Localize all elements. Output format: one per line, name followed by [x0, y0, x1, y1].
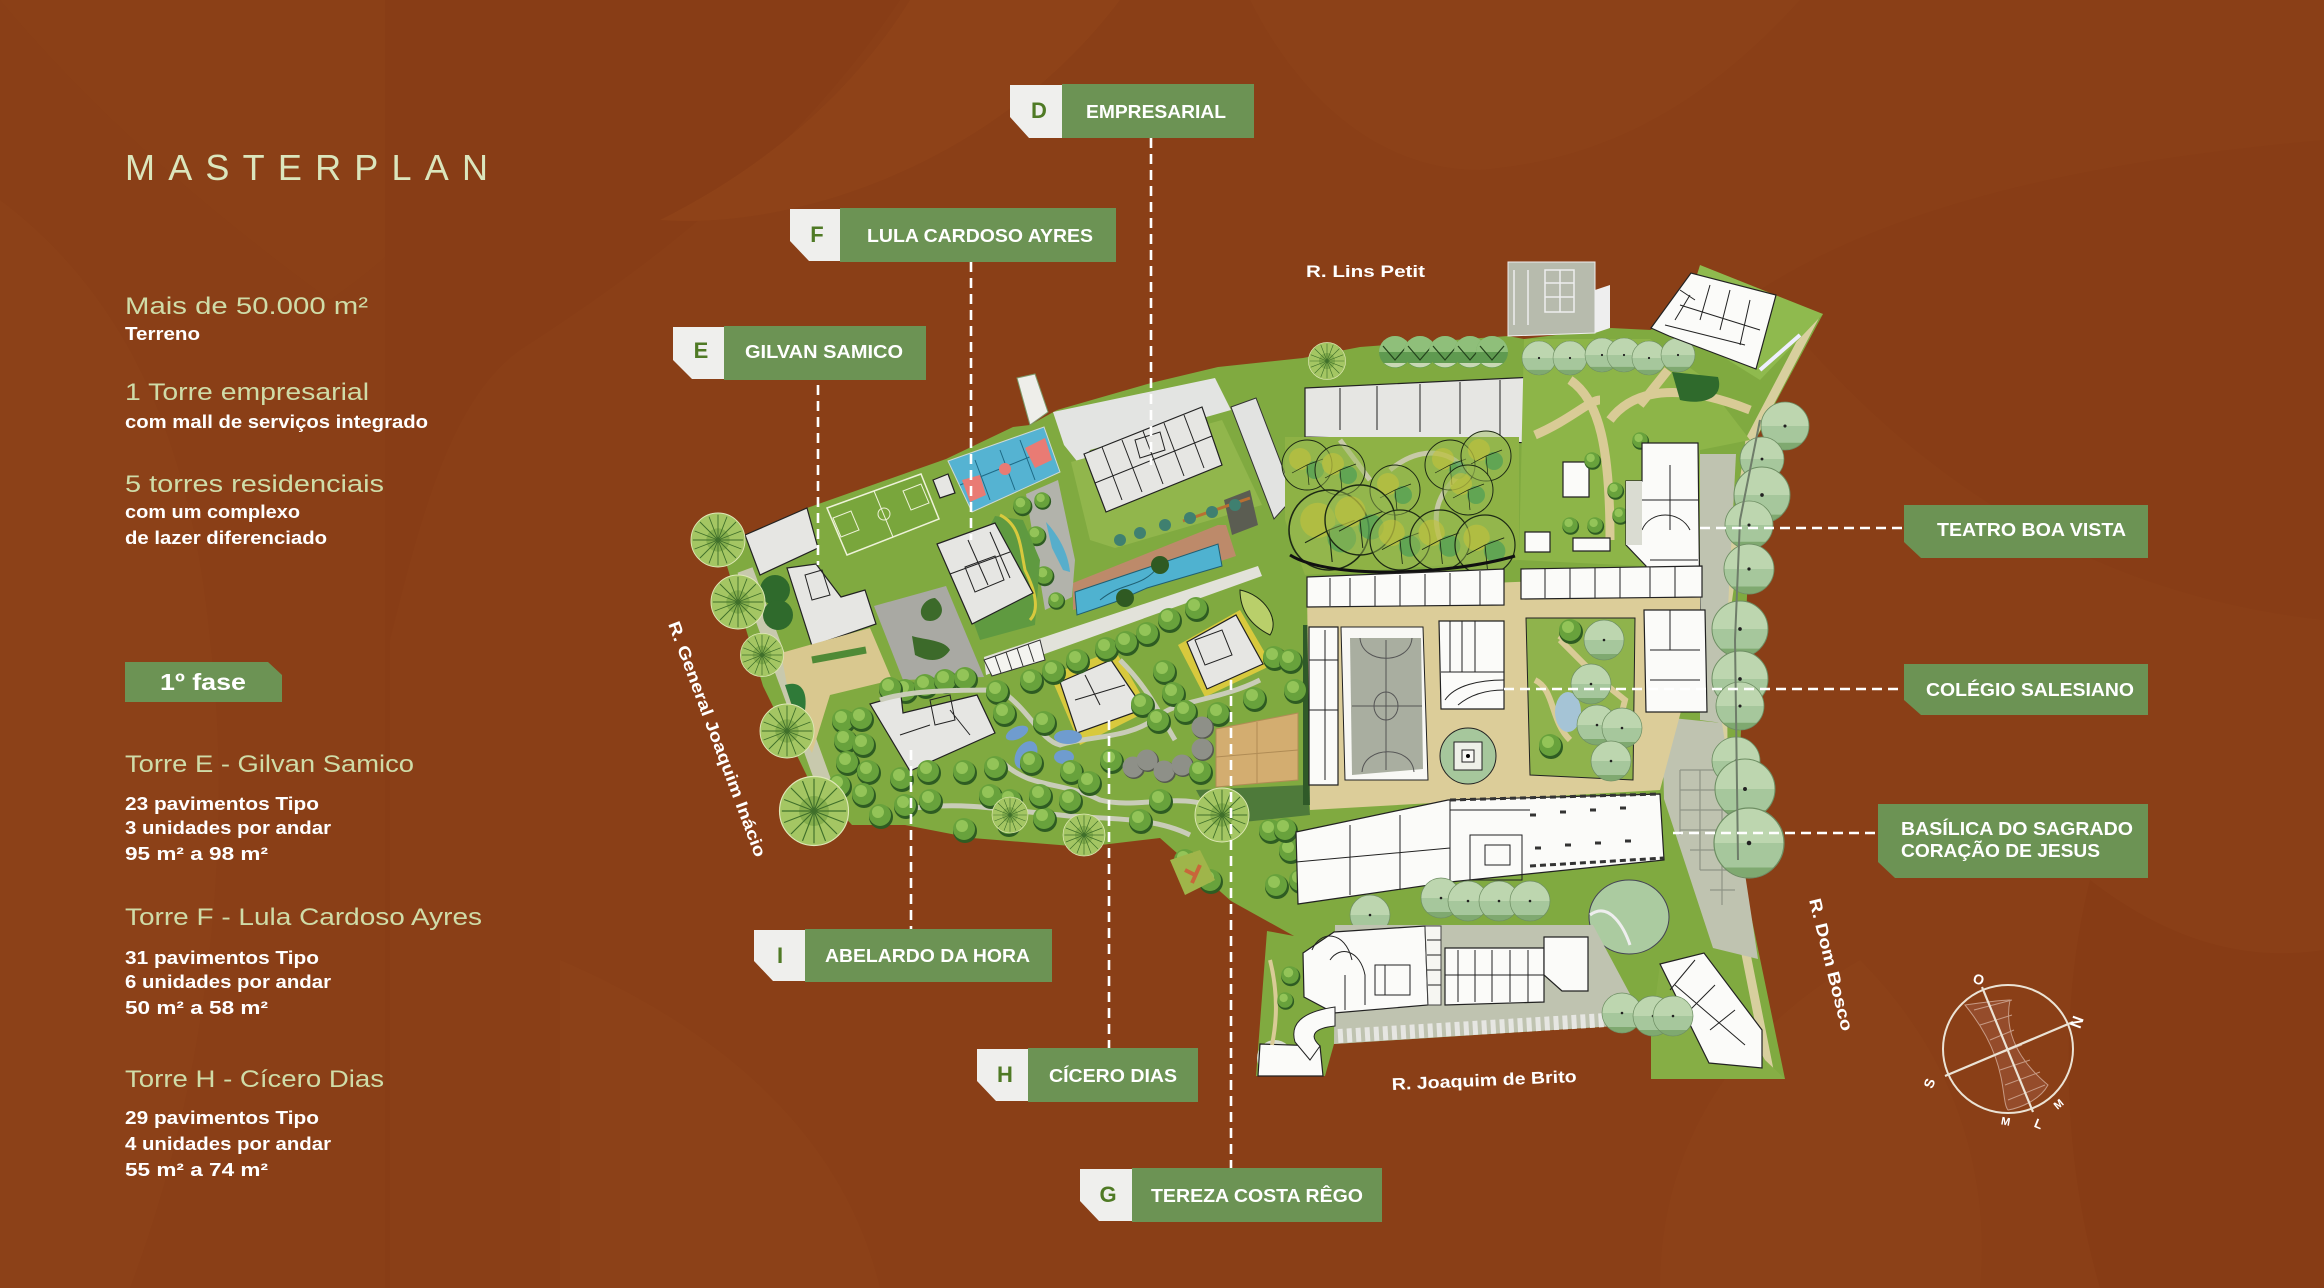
park trees — [828, 597, 1313, 899]
tower label E: E — [694, 338, 708, 363]
dome tree — [1589, 880, 1669, 954]
courtyard garden — [1526, 618, 1642, 781]
tower label E — [673, 326, 926, 380]
leader lines — [818, 138, 1904, 1168]
compass: O — [1971, 970, 1987, 989]
street name: General Joaquim Inácio: R. General Joaquim Inácio — [664, 619, 770, 860]
tower F specs: Torre F - Lula Cardoso Ayres — [125, 904, 482, 931]
north east tower — [1651, 265, 1823, 380]
compass: L — [2032, 1115, 2045, 1132]
north east garden — [1519, 338, 1750, 566]
badge: first phase — [125, 662, 282, 702]
key figure: land area: Terreno — [125, 324, 200, 344]
amphitheater — [1439, 621, 1504, 709]
parking stalls — [1680, 770, 1735, 905]
basketball court blue — [948, 427, 1060, 512]
grey road east — [1662, 454, 1758, 959]
tower label H — [977, 1048, 1198, 1102]
ground — [727, 273, 1823, 1079]
street name: Joaquim de Brito: R. Joaquim de Brito — [1391, 1067, 1577, 1094]
south east trees — [1602, 993, 1693, 1036]
compass: M — [2052, 1097, 2066, 1112]
landmark label: Colégio Salesiano — [1904, 664, 2148, 715]
compass — [1920, 970, 2088, 1132]
east boulevard trees — [1712, 402, 1809, 878]
tower label F: LULA CARDOSO AYRES — [867, 226, 1093, 246]
square fountain with tree — [1440, 728, 1496, 784]
tower H specs: 29 pavimentos Tipo — [125, 1108, 319, 1128]
park paths — [880, 660, 1260, 835]
tower E — [760, 564, 876, 646]
tower label G: G — [1099, 1182, 1117, 1207]
tower H specs: 4 unidades por andar — [125, 1134, 331, 1154]
tower label D: D — [1031, 98, 1047, 123]
south building and garage — [1303, 925, 1646, 1044]
landmark label: Colégio Salesiano: COLÉGIO SALESIANO — [1926, 679, 2134, 700]
sand plaza — [781, 628, 892, 753]
landmark label: Basílica — [1878, 804, 2148, 878]
key figure: residential towers: com um complexo — [125, 502, 300, 522]
tower label G: TEREZA COSTA RÊGO — [1151, 1185, 1363, 1206]
tower E specs: 23 pavimentos Tipo — [125, 794, 319, 814]
south east tower — [1651, 953, 1785, 1079]
tower H specs: 55 m² a 74 m² — [125, 1160, 268, 1180]
compass: S — [1920, 1076, 1938, 1090]
grey service yard with small pool — [1013, 480, 1075, 610]
tower label D — [1010, 84, 1254, 138]
street name: Dom Bosco: R. Dom Bosco — [1805, 896, 1856, 1033]
tree row behind tower I — [879, 667, 978, 704]
south trees — [1350, 878, 1550, 935]
palms along west edge — [691, 342, 1346, 846]
tower label G — [1080, 1168, 1382, 1222]
side road along west edge — [745, 570, 830, 800]
parking block — [1508, 262, 1610, 336]
sports court — [1341, 627, 1428, 780]
compass: N — [2068, 1014, 2088, 1031]
tower label I — [754, 929, 1052, 982]
tower label I: I — [777, 943, 783, 968]
tower H specs — [125, 1066, 384, 1180]
landmark label: Basílica: CORAÇÃO DE JESUS — [1901, 840, 2100, 861]
ponds — [1004, 722, 1082, 773]
tower G — [1178, 590, 1273, 697]
tower E specs — [125, 751, 414, 864]
tower I — [870, 695, 995, 771]
tree row north — [1379, 336, 1508, 368]
dark garden band and hedge — [1196, 625, 1313, 825]
east street verge — [1722, 316, 1815, 1075]
landmark label: Basílica: BASÍLICA DO SAGRADO — [1901, 818, 2133, 839]
site map illustration — [691, 262, 1823, 1079]
left column text — [125, 147, 488, 1180]
key figure: land area: Mais de 50.000 m² — [125, 293, 368, 320]
key figure: business tower — [125, 379, 428, 432]
tower F — [937, 515, 1040, 640]
landmark label: Teatro Boa Vista: TEATRO BOA VISTA — [1937, 520, 2126, 540]
north block — [1305, 377, 1537, 449]
leisure deck and pool — [1073, 525, 1236, 615]
tower E specs: 3 unidades por andar — [125, 818, 331, 838]
title: MASTERPLAN — [125, 147, 488, 188]
compass: M — [2000, 1115, 2011, 1129]
key figure: residential towers: 5 torres residenciais — [125, 471, 384, 498]
tower label H: CÍCERO DIAS — [1049, 1065, 1177, 1086]
tower E specs: 95 m² a 98 m² — [125, 844, 268, 864]
playground — [1170, 850, 1215, 895]
south west corner structure — [1257, 960, 1335, 1076]
landmark label: Teatro Boa Vista — [1904, 505, 2148, 558]
tower F specs — [125, 904, 482, 1018]
tower F specs: 6 unidades por andar — [125, 972, 331, 992]
tower label H: H — [997, 1062, 1013, 1087]
key figure: business tower: 1 Torre empresarial — [125, 379, 369, 406]
tower label F — [790, 208, 1116, 262]
school wings and sand paths — [1307, 566, 1707, 810]
key figure: business tower: com mall de serviços integrado — [125, 412, 428, 432]
tower label D: EMPRESARIAL — [1086, 102, 1226, 122]
entry strip — [1017, 374, 1048, 425]
tower label E: GILVAN SAMICO — [745, 342, 903, 362]
tower H specs: Torre H - Cícero Dias — [125, 1066, 384, 1093]
key figure: residential towers — [125, 471, 384, 548]
tower E specs: Torre E - Gilvan Samico — [125, 751, 414, 778]
tower H — [1050, 650, 1150, 745]
tower F specs: 31 pavimentos Tipo — [125, 948, 319, 968]
tower F specs: 50 m² a 58 m² — [125, 998, 268, 1018]
plaza grey — [874, 586, 984, 680]
northwest garden — [1282, 431, 1519, 575]
business tower with driveway — [1053, 378, 1294, 548]
small white kiosk — [933, 474, 955, 498]
soccer field — [827, 474, 939, 555]
central road with stairs — [984, 566, 1262, 676]
small west building strip — [745, 508, 818, 575]
key figure: residential towers: de lazer diferenciado — [125, 528, 327, 548]
teatro building — [1626, 443, 1700, 620]
tower label F: F — [810, 222, 824, 247]
tower label I: ABELARDO DA HORA — [825, 946, 1030, 966]
clay courts — [1216, 713, 1298, 787]
basilica — [1296, 794, 1664, 904]
badge: first phase: 1º fase — [160, 669, 246, 695]
street name: Lins Petit: R. Lins Petit — [1306, 262, 1425, 281]
key figure: land area — [125, 293, 368, 344]
